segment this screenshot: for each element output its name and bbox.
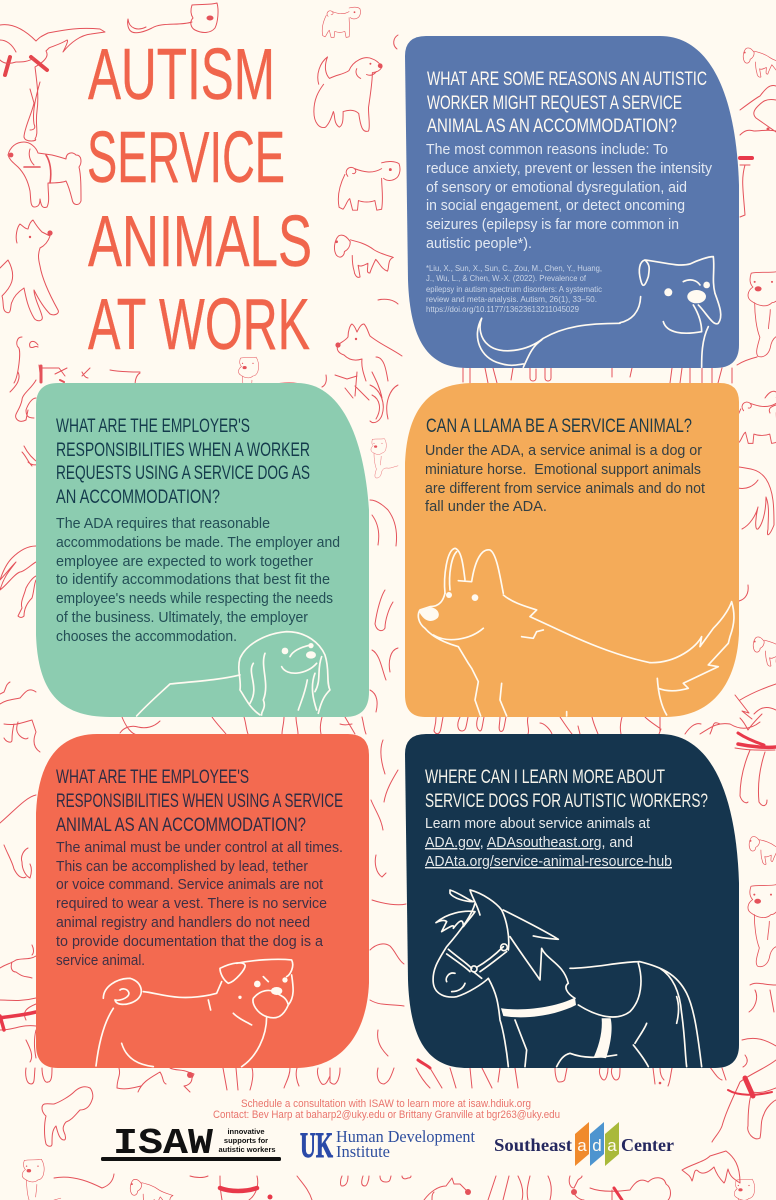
text: employer body	[56, 516, 340, 645]
text: employer body: employee are expected to work together	[56, 554, 313, 570]
citation: https://doi.org/10.1177/13623613211045029	[426, 305, 579, 314]
heading: llama: CAN A LLAMA BE A SERVICE ANIMAL?	[426, 415, 692, 437]
footer contact text: Schedule a consultation with ISAW to learn more at isaw.hdiuk.org	[241, 1098, 531, 1110]
text: llama body: miniature horse. Emotional support animals	[425, 462, 701, 478]
text: reasons body: The most common reasons include: To	[426, 142, 668, 158]
icon: spaniel	[137, 632, 330, 716]
logo: UK Human Development Institute	[300, 1125, 475, 1165]
text: employee body: service animal.	[56, 953, 145, 969]
text: employer body: of the business. Ultimately, the employer	[56, 610, 308, 626]
logo: Southeast ADA Center: a	[607, 1136, 617, 1155]
heading: employee: WHAT ARE THE EMPLOYEE'S	[56, 766, 249, 788]
logo: Southeast ADA Center: Center	[621, 1135, 674, 1155]
center gutter	[370, 385, 398, 423]
right strip	[743, 48, 776, 77]
text: employer body: to identify accommodations that best fit the	[56, 572, 330, 588]
text: llama body: fall under the ADA.	[425, 499, 547, 515]
text: employer body: chooses the accommodation.	[56, 629, 237, 645]
citation: *Liu, X., Sun, X., Sun, C., Zou, M., Chen, Y., Huang,	[426, 264, 602, 273]
heading: employer: WHAT ARE THE EMPLOYER'S	[56, 415, 250, 437]
text: employee body: required to wear a vest. There is no service	[56, 896, 327, 912]
icon: bulldog	[477, 257, 721, 367]
text: employer body: employee's needs while respecting the needs	[56, 591, 333, 607]
logo: ISAW	[101, 1123, 281, 1164]
logo: Southeast ADA Center: Southeast	[494, 1135, 572, 1155]
text: reasons body: seizures (epilepsy is far more common in	[426, 217, 679, 233]
heading: employee: ANIMAL AS AN ACCOMMODATION?	[56, 814, 306, 836]
lower band	[26, 1068, 194, 1092]
heading: employer: AN ACCOMMODATION?	[56, 486, 220, 508]
citation: J., Wu, L., & Chen, W.-X. (2022). Prevalence of	[426, 274, 587, 283]
text: reasons body: autistic people*).	[426, 236, 532, 252]
heading: employer	[56, 415, 310, 508]
text: employee body: animal registry and handlers do not need	[56, 915, 310, 931]
logo: UK Human Development Institute: Human Development	[336, 1127, 475, 1146]
title	[87, 35, 312, 365]
text: learn more body	[425, 816, 672, 870]
heading: employee: RESPONSIBILITIES WHEN USING A SERVICE	[56, 790, 343, 812]
citation: epilepsy in autism spectrum disorders: A systematic	[426, 285, 602, 294]
gutter between rows	[120, 717, 366, 735]
panel: learn more	[405, 734, 739, 1068]
text: learn more body: ADAta.org/service-animal-resource-hub	[425, 854, 672, 870]
logo: UK Human Development Institute: Institute	[336, 1142, 390, 1161]
panel: employer responsibilities	[36, 383, 369, 717]
text: reasons body	[426, 142, 713, 252]
text: learn more body: Learn more about service animals at	[425, 816, 650, 832]
icon: miniature horse	[433, 890, 702, 1067]
logo: Southeast ADA Center: a	[577, 1136, 587, 1155]
icon: pug	[96, 959, 293, 1067]
left strip	[16, 380, 36, 421]
text: learn more body: ADA.gov, ADAsoutheast.org, and	[425, 835, 633, 851]
text: employer body: The ADA requires that reasonable	[56, 516, 270, 532]
footer contact text: Contact: Bev Harp at baharp2@uky.edu or Brittany Granville at bgr263@uky.edu	[213, 1109, 560, 1121]
icon: corgi	[418, 548, 734, 716]
citation	[426, 264, 602, 314]
text: llama body: Under the ADA, a service animal is a dog or	[425, 443, 702, 459]
heading: employer: REQUESTS USING A SERVICE DOG AS	[56, 462, 310, 484]
logo: ISAW: innovative	[227, 1127, 265, 1136]
heading: employer: RESPONSIBILITIES WHEN A WORKER	[56, 439, 310, 461]
heading: reasons: ANIMAL AS AN ACCOMMODATION?	[427, 115, 677, 137]
panel: employee responsibilities	[36, 734, 369, 1068]
footer contact text	[213, 1098, 560, 1121]
text: employee body: This can be accomplished by lead, tether	[56, 859, 308, 875]
title: AT WORK	[88, 285, 310, 365]
text: employee body	[56, 840, 343, 969]
pug lower-left	[42, 1087, 93, 1146]
heading: learn more	[425, 766, 708, 812]
text: reasons body: of sensory or emotional dysregulation, aid	[426, 180, 687, 196]
logo: ISAW: autistic workers	[218, 1145, 276, 1154]
title: AUTISM	[88, 35, 275, 115]
logo: Southeast ADA Center: d	[592, 1136, 602, 1155]
text: employer body: accommodations be made. The employer and	[56, 535, 340, 551]
text: reasons body: reduce anxiety, prevent or lessen the intensity	[426, 161, 713, 177]
citation: review and meta-analysis. Autism, 26(1), 33–50.	[426, 295, 597, 304]
heading: learn more: WHERE CAN I LEARN MORE ABOUT	[425, 766, 665, 788]
heading: employee	[56, 766, 343, 836]
logo: ISAW: ISAW	[113, 1123, 213, 1164]
logo: Southeast ADA Center	[494, 1122, 674, 1166]
text: employee body: or voice command. Service animals are not	[56, 877, 323, 893]
panel: llama question	[405, 383, 739, 717]
logo: ISAW: supports for	[224, 1136, 268, 1145]
panel: reasons for requesting a service animal	[405, 36, 739, 368]
text: employee body: to provide documentation that the dog is a	[56, 934, 324, 950]
logo: UK Human Development Institute: UK	[300, 1125, 333, 1165]
title: SERVICE	[87, 118, 285, 198]
text: employee body: The animal must be under control at all times.	[56, 840, 343, 856]
text: llama body: are different from service animals and do not	[425, 481, 705, 497]
title: ANIMALS	[88, 202, 312, 282]
text: llama body	[425, 443, 705, 515]
text: reasons body: in social engagement, or detect oncoming	[426, 198, 685, 214]
heading: reasons	[427, 68, 707, 137]
